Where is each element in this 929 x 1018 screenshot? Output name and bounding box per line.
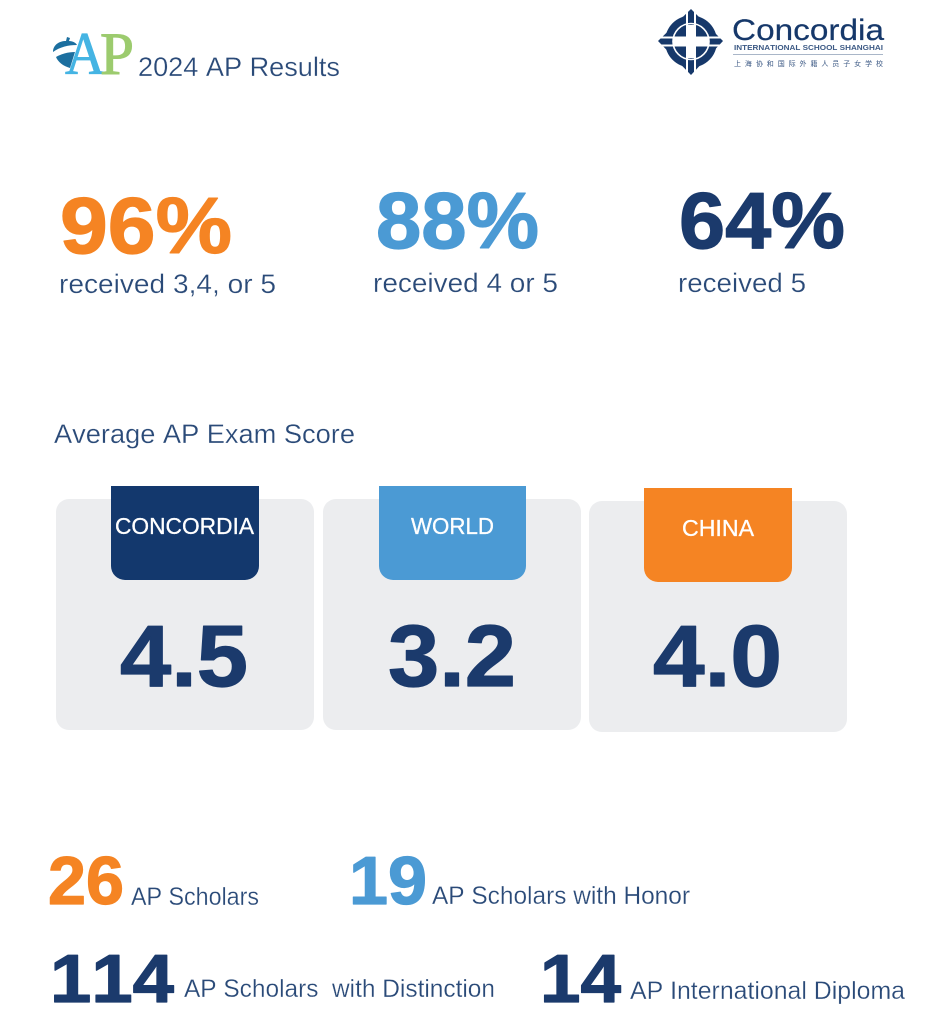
panel: World score: 3.2 bbox=[388, 608, 516, 705]
stat: 88 percent: 88% bbox=[376, 176, 539, 265]
stat: AP Scholars with Distinction bbox=[50, 941, 495, 1017]
Concordia logo bbox=[656, 7, 884, 77]
stat: 96 percent: received 3,4, or 5 bbox=[59, 269, 276, 299]
stat: 96 percent: 96% bbox=[60, 181, 232, 270]
stat: AP Scholars bbox=[48, 843, 259, 919]
panel: Concordia score: CONCORDIA bbox=[115, 513, 255, 539]
Concordia logo: INTERNATIONAL SCHOOL SHANGHAI bbox=[734, 43, 883, 52]
panel: China score bbox=[589, 488, 847, 732]
stat: 96 percent bbox=[59, 181, 276, 299]
stat: 88 percent: received 4 or 5 bbox=[373, 268, 558, 298]
stat: AP International Diploma: 14 bbox=[540, 941, 621, 1017]
stat: AP Scholars with Honor bbox=[349, 843, 690, 919]
panel: China score: 4.0 bbox=[653, 608, 782, 705]
panel: World score: WORLD bbox=[411, 513, 494, 539]
stat: 64 percent: received 5 bbox=[678, 268, 806, 298]
icon: AP acorn logo: P bbox=[100, 21, 134, 87]
stat: AP Scholars: AP Scholars bbox=[131, 883, 259, 911]
icon: AP acorn logo bbox=[53, 21, 134, 87]
panel: China score: CHINA bbox=[682, 515, 755, 541]
title: 2024 AP Results bbox=[138, 52, 340, 82]
heading: average score: Average AP Exam Score bbox=[54, 419, 355, 449]
panel: World score bbox=[323, 486, 581, 730]
stat: AP Scholars with Honor: 19 bbox=[349, 843, 427, 919]
stat: AP Scholars with Honor: AP Scholars with Honor bbox=[432, 882, 690, 910]
icon: AP acorn logo: A bbox=[65, 21, 105, 87]
stat: AP Scholars with Distinction: AP Scholars with Distinction bbox=[184, 975, 495, 1003]
stat: 64 percent: 64% bbox=[679, 176, 845, 265]
icon: Concordia diamond emblem bbox=[656, 7, 726, 77]
panel: Concordia score bbox=[56, 486, 314, 730]
stat: AP International Diploma: AP International Diploma bbox=[630, 977, 905, 1005]
header: AP logo and title bbox=[53, 21, 340, 87]
Concordia logo: 上海协和国际外籍人员子女学校 bbox=[734, 59, 883, 68]
stat: AP Scholars: 26 bbox=[48, 843, 124, 919]
stat: 64 percent bbox=[678, 176, 845, 298]
school name: Concordia bbox=[732, 14, 884, 47]
stat: AP International Diploma bbox=[540, 941, 905, 1017]
panel: Concordia score: 4.5 bbox=[120, 608, 248, 705]
stat: 88 percent bbox=[373, 176, 558, 298]
stat: AP Scholars with Distinction: 114 bbox=[50, 941, 174, 1017]
